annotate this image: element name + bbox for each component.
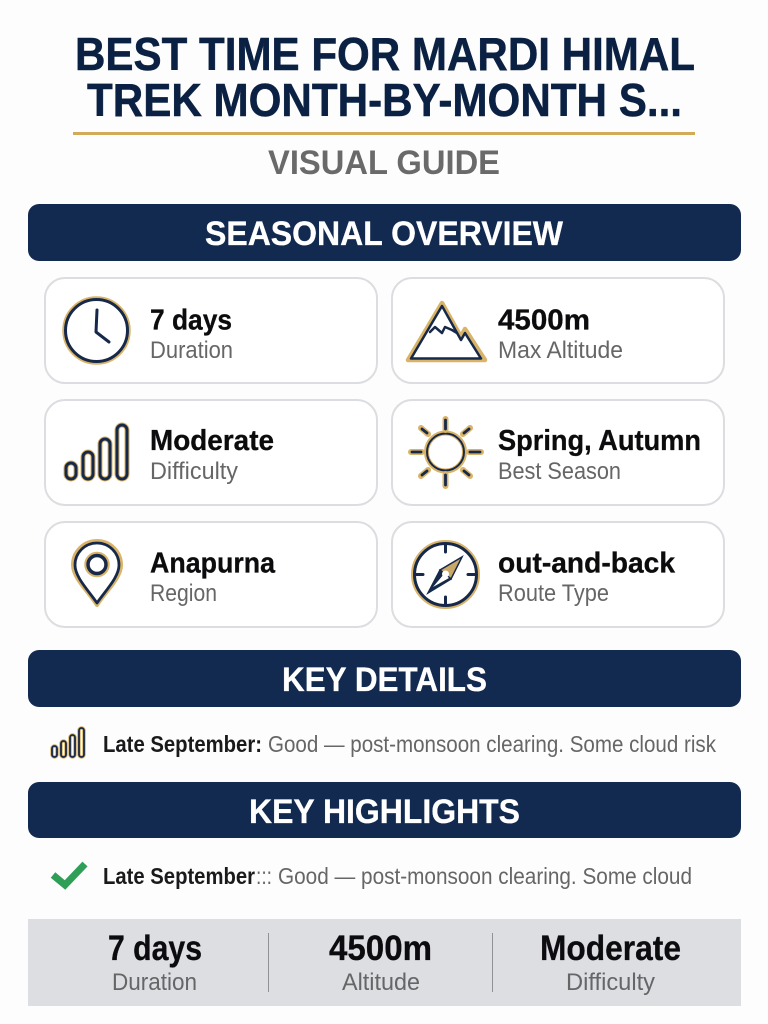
icon: difficulty bars	[66, 425, 127, 479]
panel: region: Region	[150, 580, 217, 607]
stat: duration	[108, 929, 202, 996]
icon: mountain	[408, 303, 485, 360]
icon: small difficulty bars	[52, 728, 84, 757]
panel: best season: Best Season	[498, 458, 621, 485]
key detail row	[52, 728, 716, 757]
panel: region	[45, 522, 377, 627]
icon: map pin	[73, 541, 121, 605]
panel: difficulty	[45, 400, 377, 505]
stat: difficulty: Difficulty	[566, 969, 655, 996]
icon: check mark	[53, 864, 85, 885]
stat: difficulty: Moderate	[540, 929, 681, 968]
panel: difficulty: Difficulty	[150, 458, 238, 485]
title: BEST TIME FOR MARDI HIMAL	[75, 28, 695, 80]
panel: summary stats	[28, 919, 741, 1006]
panel: best season	[392, 400, 724, 505]
stat: altitude: Altitude	[342, 969, 420, 996]
heading: key details	[28, 650, 741, 707]
stat: altitude	[329, 929, 432, 996]
stat: difficulty	[540, 929, 681, 996]
panel: difficulty: Moderate	[150, 425, 274, 457]
key highlight row: :::	[256, 863, 272, 889]
icon: compass	[414, 542, 478, 606]
heading: key details: KEY DETAILS	[282, 661, 487, 699]
panel: best season: Spring, Autumn	[498, 425, 701, 457]
panel: max altitude: Max Altitude	[498, 337, 623, 364]
stat: altitude: 4500m	[329, 929, 432, 968]
key highlight row: Late September	[103, 863, 255, 889]
panel: max altitude: 4500m	[498, 304, 590, 336]
key detail row: Late September:	[103, 731, 262, 757]
subtitle: VISUAL GUIDE	[268, 144, 500, 182]
panel: region: Anapurna	[150, 548, 276, 580]
panel: duration: 7 days	[150, 304, 232, 336]
stat: duration: Duration	[112, 969, 197, 996]
panel: duration	[45, 278, 377, 383]
key detail row: Good — post-monsoon clearing. Some cloud risk	[268, 731, 716, 757]
title: TREK MONTH-BY-MONTH S...	[87, 74, 682, 126]
heading: key highlights: KEY HIGHLIGHTS	[249, 793, 520, 831]
heading: seasonal overview	[28, 204, 741, 261]
panel: max altitude	[392, 278, 724, 383]
panel: duration: Duration	[150, 337, 233, 364]
icon: sun	[411, 419, 481, 486]
panel: route type	[392, 522, 724, 627]
heading: seasonal overview: SEASONAL OVERVIEW	[205, 215, 563, 253]
icon: clock	[64, 298, 128, 362]
title	[75, 28, 695, 126]
key highlight row	[53, 863, 692, 889]
panel: route type: Route Type	[498, 580, 609, 607]
key highlight row: Good — post-monsoon clearing. Some cloud	[278, 863, 692, 889]
stat: duration: 7 days	[108, 929, 202, 968]
heading: key highlights	[28, 782, 741, 838]
panel: route type: out-and-back	[498, 548, 676, 580]
